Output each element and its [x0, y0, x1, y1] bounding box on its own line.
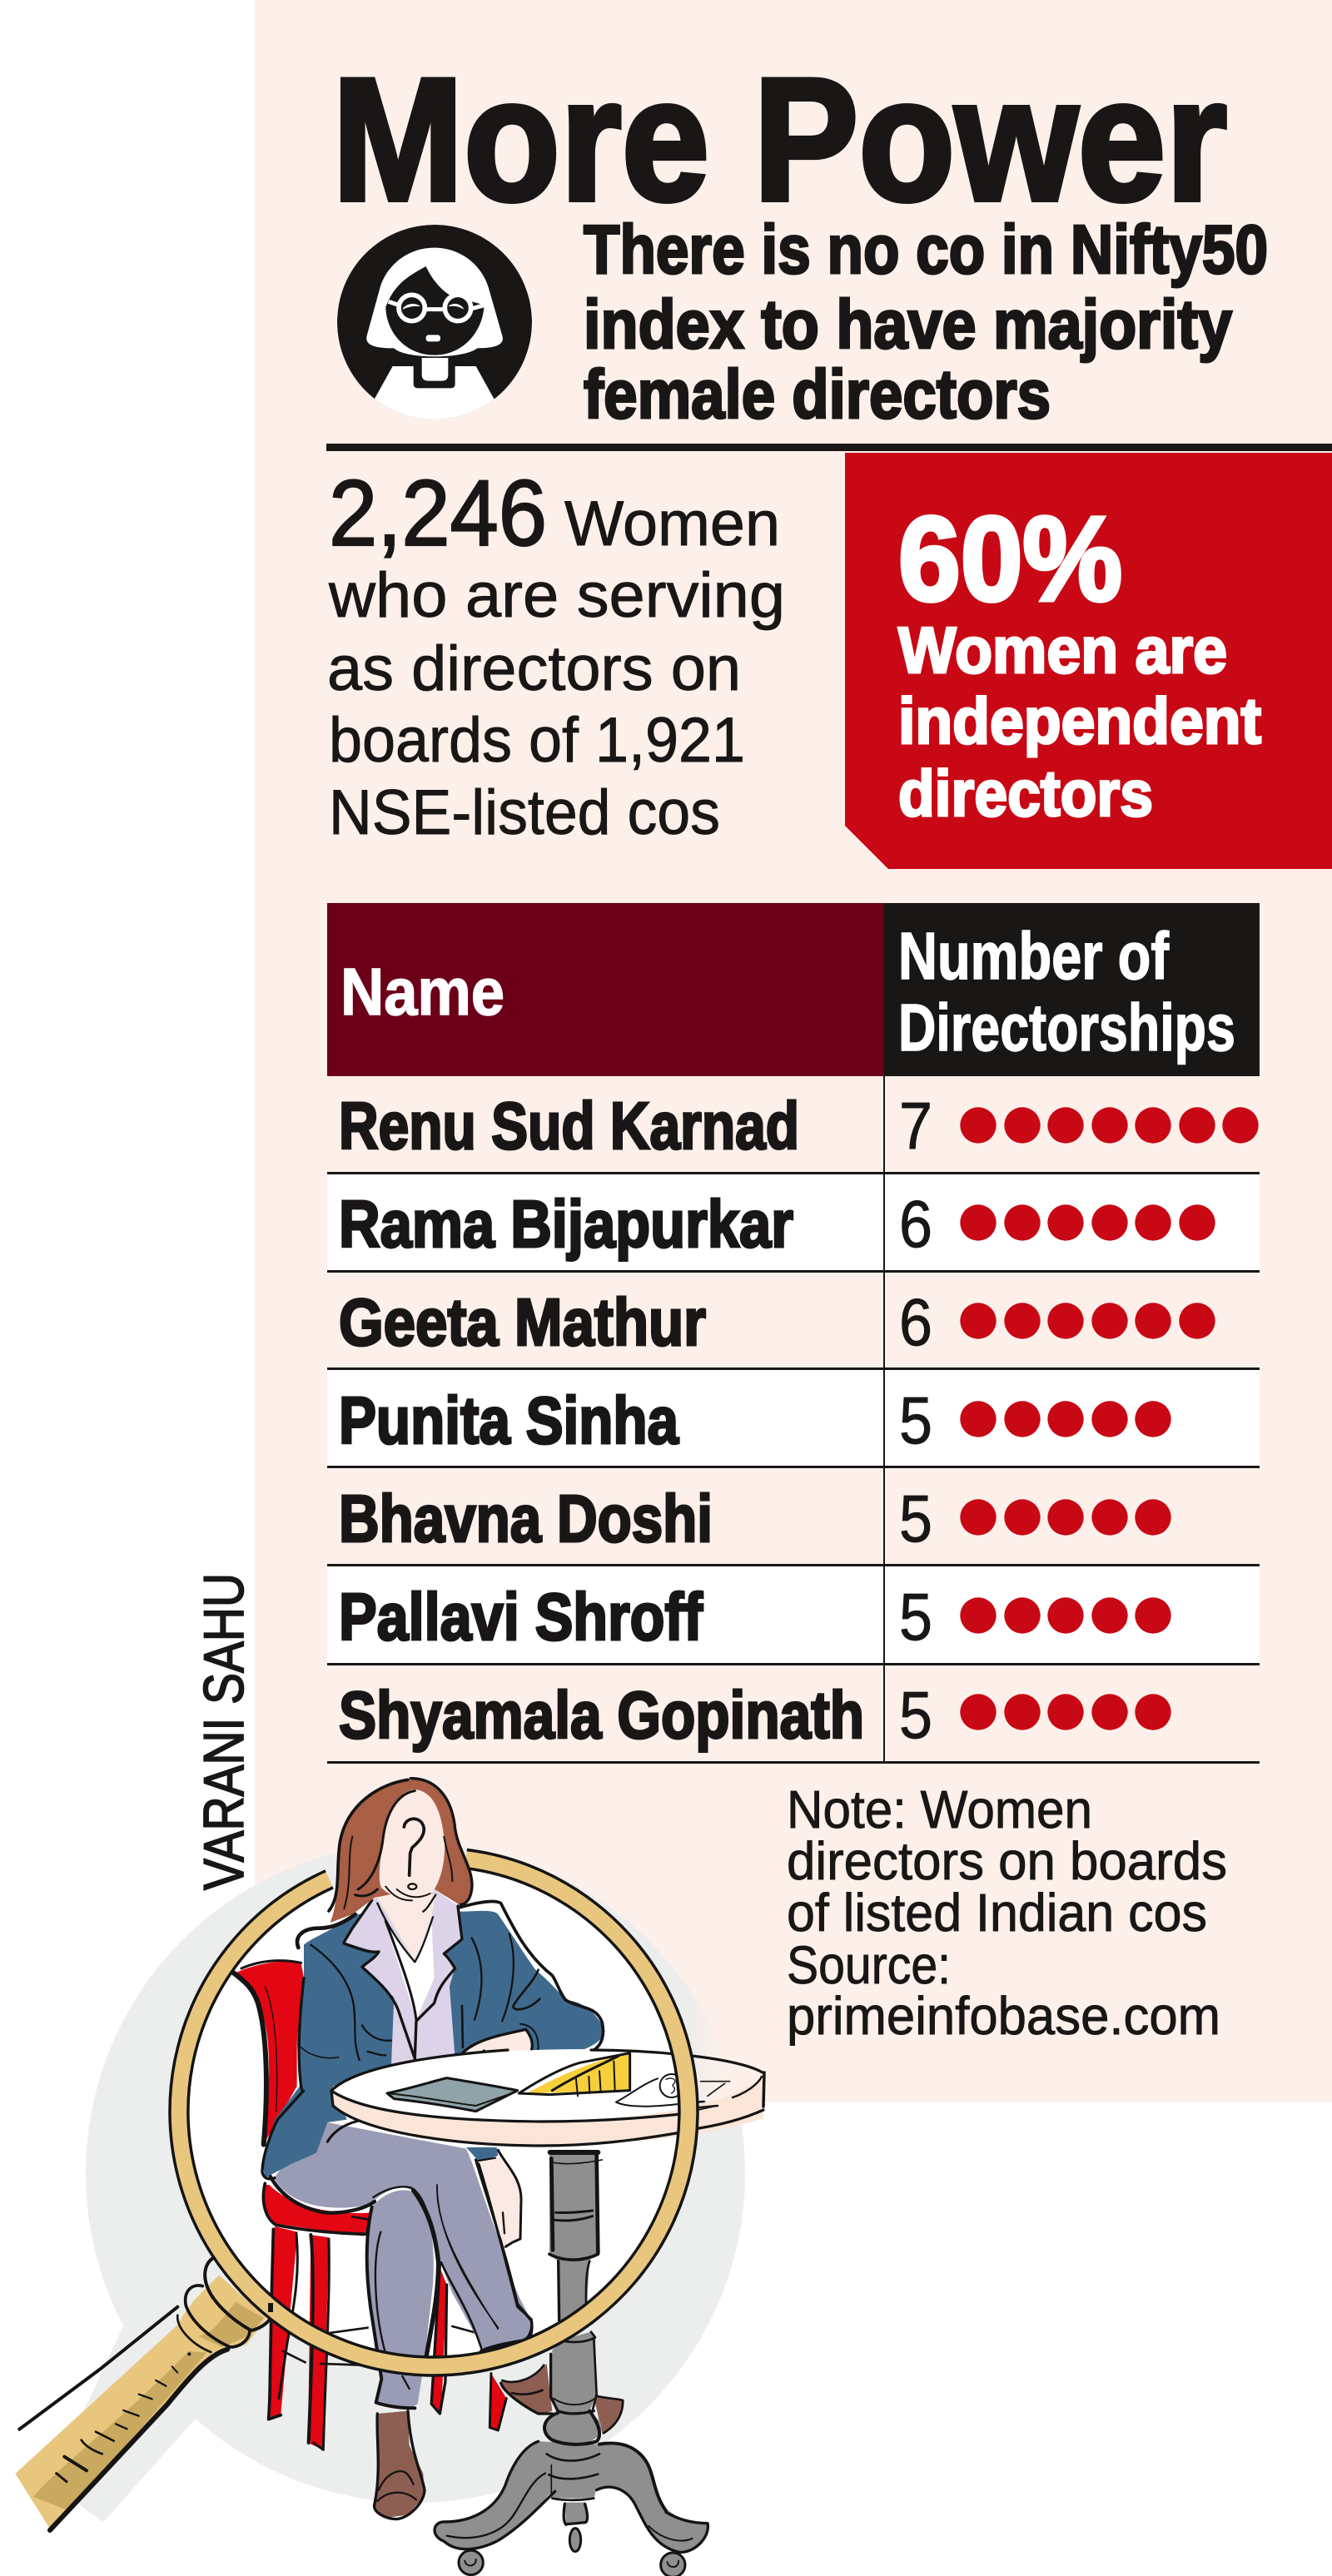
row: Punita Sinha: Punita Sinha — [339, 1383, 678, 1457]
row: Shyamala Gopinath: Shyamala Gopinath — [339, 1678, 864, 1752]
panel: background — [255, 0, 1332, 2102]
stat text: 2,246 women: as directors on — [327, 633, 741, 704]
woman: jacket, blouse and hands — [262, 1889, 605, 2179]
table rules — [327, 1076, 1260, 1764]
lens — [188, 1866, 679, 2357]
cheese — [519, 2053, 730, 2112]
row: Rama Bijapurkar: Rama Bijapurkar — [339, 1187, 793, 1261]
row: Rama Bijapurkar: 6 — [899, 1187, 932, 1261]
magnifier ring — [170, 1849, 698, 2375]
row: Punita Sinha: 5 — [899, 1383, 932, 1457]
icon: woman with glasses — [337, 225, 532, 426]
illustration: magnifying glass over woman at table — [15, 1779, 764, 2576]
stat text: 2,246 women: 2,246 — [329, 461, 547, 565]
woman: trousers and boots — [265, 2122, 623, 2519]
note and source: directors on boards — [787, 1831, 1227, 1891]
hanging hand — [437, 2147, 532, 2339]
row: Renu Sud Karnad — [339, 1089, 1259, 1163]
row: Pallavi Shroff: 5 — [899, 1580, 932, 1654]
book — [387, 2078, 518, 2112]
row: Bhavna Doshi: 5 — [899, 1482, 932, 1556]
credit: Varani Sahu: VARANI SAHU — [192, 1573, 256, 1890]
subtitle: female directors — [584, 355, 1051, 433]
row: Bhavna Doshi — [339, 1482, 1171, 1556]
row: Geeta Mathur — [339, 1285, 1215, 1359]
row: Renu Sud Karnad: 7 — [899, 1089, 932, 1163]
row: Pallavi Shroff: Pallavi Shroff — [339, 1580, 703, 1654]
stat text: 2,246 women: who are serving — [328, 560, 785, 631]
callout: 60% independent directors: independent — [898, 684, 1261, 757]
row: Geeta Mathur: 6 — [899, 1285, 932, 1359]
title: More Power — [332, 42, 1227, 237]
callout: 60% independent directors: Women are — [898, 613, 1227, 687]
row: Geeta Mathur: Geeta Mathur — [339, 1285, 706, 1359]
note and source: Note: Women — [787, 1779, 1092, 1839]
row: Shyamala Gopinath: 5 — [899, 1678, 932, 1752]
table header: Number of — [898, 919, 1169, 993]
note and source: of listed Indian cos — [787, 1883, 1207, 1943]
callout: 60% independent directors — [845, 453, 1332, 869]
note and source — [787, 1779, 1227, 2046]
table pedestal — [435, 2152, 708, 2576]
row: Rama Bijapurkar — [339, 1187, 1215, 1261]
stat text: 2,246 women: Women — [564, 489, 780, 559]
row: Bhavna Doshi: Bhavna Doshi — [339, 1482, 713, 1556]
note and source: Source: — [787, 1935, 951, 1995]
subtitle — [584, 211, 1268, 433]
table header — [327, 903, 1260, 1076]
stat text: 2,246 women: NSE-listed cos — [329, 777, 720, 848]
row: Pallavi Shroff — [339, 1580, 1171, 1654]
subtitle: index to have majority — [584, 285, 1232, 363]
table header: Directorships — [898, 990, 1235, 1065]
magnifier handle — [15, 2257, 271, 2530]
chair — [233, 1961, 506, 2449]
row: Renu Sud Karnad: Renu Sud Karnad — [339, 1089, 799, 1163]
callout: 60% independent directors: directors — [898, 757, 1153, 830]
row: Punita Sinha — [339, 1383, 1171, 1457]
stat text: 2,246 women: boards of 1,921 — [329, 705, 745, 776]
table row stripes — [327, 1173, 1260, 1664]
table header: Name — [340, 955, 504, 1029]
stat text: 2,246 women — [327, 461, 785, 848]
callout: 60% independent directors: 60% — [898, 492, 1122, 626]
table — [327, 903, 1260, 1764]
grey backdrop disc — [50, 1844, 746, 2522]
rule — [326, 444, 1332, 451]
note and source: primeinfobase.com — [787, 1986, 1220, 2046]
table top — [331, 2049, 764, 2146]
woman: hair and face with question mark — [329, 1779, 472, 1923]
